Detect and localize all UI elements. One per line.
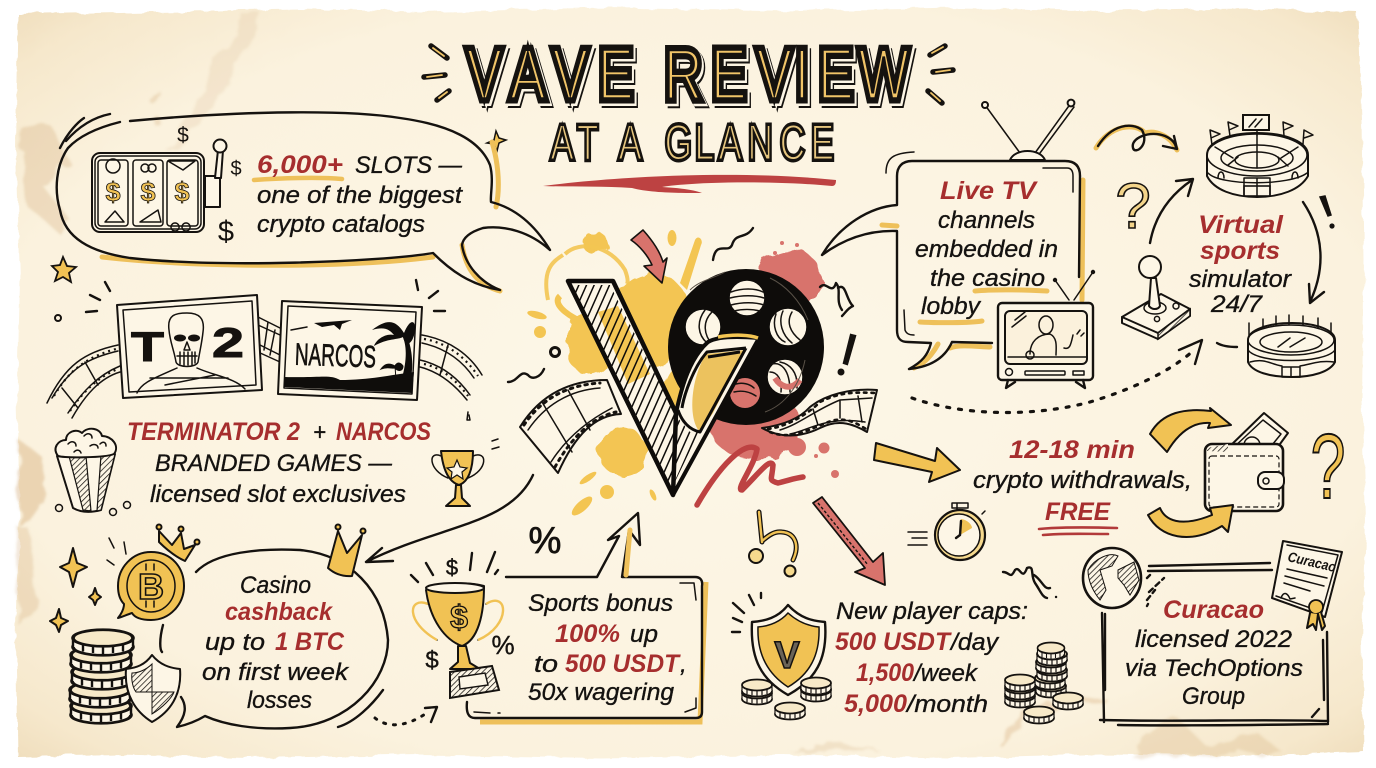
poster: Narcos xyxy=(278,301,422,400)
text: withdrawals: 12-18 min xyxy=(1009,436,1135,464)
icon: joystick xyxy=(1122,256,1190,339)
icons: sparkles xyxy=(50,548,101,632)
text: sports bonus: 50x wagering xyxy=(528,679,674,706)
text: player caps: /month xyxy=(905,691,988,718)
icon: popcorn xyxy=(56,429,130,516)
icon: big trophy: % xyxy=(491,630,515,660)
text: player caps: 1,500 xyxy=(856,659,914,687)
arrows: yellow cycle xyxy=(1148,408,1233,537)
panel: sports bonus xyxy=(411,513,706,722)
icon: globe xyxy=(1083,548,1141,608)
text: curacao: Group xyxy=(1182,683,1245,710)
icon: crown on bubble xyxy=(328,524,366,576)
text: virtual sports: Virtual xyxy=(1198,211,1284,239)
icon: stopwatch xyxy=(908,503,985,560)
text: virtual sports: 24/7 xyxy=(1210,291,1263,318)
icons: coin stacks xyxy=(1005,642,1083,724)
red scribble xyxy=(697,447,803,505)
text: live tv: embedded in xyxy=(915,236,1058,263)
text: live tv: channels xyxy=(938,207,1035,234)
poster: Terminator 2: 2 xyxy=(212,319,244,366)
text: player caps: New player caps: xyxy=(836,598,1028,625)
title: VAVE REVIEW: VAVE REVIEW xyxy=(469,39,912,119)
icon: stadium top xyxy=(1207,115,1313,197)
text: casino cashback: losses xyxy=(247,687,312,714)
panel: slots bubble xyxy=(57,112,550,291)
squiggle xyxy=(1003,567,1056,598)
icons: coins under shield xyxy=(742,678,831,720)
red title underline xyxy=(543,175,836,193)
text: virtual sports: sports xyxy=(1200,237,1280,265)
text: live tv xyxy=(915,177,1058,323)
text: player caps: /week xyxy=(912,660,979,687)
decorative squiggles around logo xyxy=(508,228,855,382)
icon: slot machine: $ xyxy=(177,124,189,147)
bubble outline xyxy=(57,112,550,291)
panel: curacao license xyxy=(1083,541,1342,725)
text: curacao: Curacao xyxy=(1163,596,1264,624)
text: sports bonus: , xyxy=(680,651,687,678)
text: withdrawals: FREE xyxy=(1045,498,1111,526)
bubble outline xyxy=(160,550,388,728)
text: casino cashback xyxy=(202,572,350,714)
icon: V shield xyxy=(732,593,825,695)
icon: slot machine: $ xyxy=(105,177,121,207)
arrow: yellow to withdrawals xyxy=(874,443,960,482)
icon: small circle xyxy=(55,315,61,321)
arrow: red to player caps xyxy=(813,497,885,585)
icon: gold crown xyxy=(156,524,200,561)
text: player caps xyxy=(835,598,1028,718)
icon: coin stack xyxy=(70,630,133,723)
text: 6,000+ slots: one of the biggest xyxy=(257,182,463,209)
icon: big trophy xyxy=(411,552,515,698)
text: Terminator 2 + Narcos: BRANDED GAMES — xyxy=(155,450,392,477)
text: live tv: lobby xyxy=(921,293,982,320)
text: curacao xyxy=(1125,596,1303,710)
icon: slot machine xyxy=(92,124,242,248)
poster: Terminator 2 xyxy=(117,295,262,398)
text: Terminator 2 + Narcos: TERMINATOR 2 xyxy=(127,418,300,446)
curved arrows xyxy=(1150,179,1335,303)
icon: big trophy: $ xyxy=(446,555,458,580)
icon: big trophy: $ xyxy=(450,599,468,635)
icon: wallet with money xyxy=(1205,413,1288,511)
certificate: Curacao xyxy=(1286,548,1338,575)
text: player caps: /day xyxy=(949,629,1000,656)
poster: Terminator 2: T xyxy=(131,323,164,370)
text: curacao: licensed 2022 xyxy=(1135,626,1292,653)
panel: new player caps xyxy=(732,512,1083,724)
speech box xyxy=(822,152,1083,369)
text: player caps: 5,000 xyxy=(844,690,907,718)
poster: Narcos: NARCOS xyxy=(294,337,377,374)
bonus box xyxy=(467,513,706,722)
arrow: dotted to virtual sports xyxy=(912,340,1202,413)
connector lines xyxy=(1148,563,1272,571)
icon: gold trophy small xyxy=(432,412,499,506)
panel: crypto withdrawals xyxy=(908,408,1346,560)
radiating dashes xyxy=(86,280,445,312)
text: curacao: via TechOptions xyxy=(1125,655,1303,682)
text: player caps: 500 USDT xyxy=(835,628,953,656)
dash xyxy=(1217,343,1237,347)
icon: slot machine: $ xyxy=(230,158,242,180)
subtitle: AT A GLANCE: AT A GLANCE xyxy=(550,115,834,171)
text: virtual sports xyxy=(1189,211,1292,318)
central splashes xyxy=(526,230,839,518)
icon: slot machine: $ xyxy=(174,177,190,207)
text: casino cashback: on first week xyxy=(202,659,350,686)
squiggle arrow xyxy=(1096,126,1177,150)
gold star near title xyxy=(487,131,506,151)
dotted arrow xyxy=(375,707,437,725)
text: 6,000+ slots: 6,000+ xyxy=(257,151,343,179)
text: sports bonus: Sports bonus xyxy=(528,590,673,617)
film strips behind posters xyxy=(47,317,482,418)
icon: small tv xyxy=(998,270,1095,388)
text: Terminator 2 + Narcos: + xyxy=(313,419,326,446)
icon: film reel xyxy=(668,269,824,425)
icon: bitcoin bubble: B xyxy=(138,566,164,607)
subtitle: AT A GLANCE: AT A GLANCE xyxy=(550,115,834,171)
film strip left of logo xyxy=(520,380,621,473)
text: sports bonus xyxy=(528,590,687,706)
title: VAVE REVIEW: VAVE REVIEW xyxy=(466,35,909,115)
gold star left xyxy=(52,257,76,282)
icon: yellow question mark: ? xyxy=(1310,416,1346,518)
title: VAVE REVIEW: VAVE REVIEW xyxy=(466,35,909,115)
icon: percent: % xyxy=(529,520,561,561)
icon: slot machine: $ xyxy=(140,177,156,207)
text: casino cashback: 1 BTC xyxy=(275,628,345,656)
license frame xyxy=(1100,613,1328,725)
text: Terminator 2 + Narcos xyxy=(127,418,431,508)
logo letter V xyxy=(568,281,759,495)
text: casino cashback: Casino xyxy=(240,572,311,599)
text: 6,000+ slots: SLOTS — xyxy=(355,152,462,179)
title: VAVE REVIEW: VAVE REVIEW xyxy=(468,38,911,117)
text: Terminator 2 + Narcos: NARCOS xyxy=(336,418,431,446)
red splatter xyxy=(701,241,839,478)
icon: V shield: V xyxy=(774,635,800,677)
panel: virtual sports xyxy=(912,115,1335,413)
text: live tv: the casino xyxy=(930,265,1045,292)
icon: shield xyxy=(126,655,180,722)
red arrow into logo xyxy=(631,230,667,283)
text: 6,000+ slots: crypto catalogs xyxy=(257,211,425,238)
certificate xyxy=(1272,541,1342,630)
text: sports bonus: 100% xyxy=(555,620,620,648)
panel: casino cashback xyxy=(50,524,388,728)
film strip right of logo xyxy=(762,390,877,436)
icon: question mark: ? xyxy=(1115,170,1151,242)
text: virtual sports: simulator xyxy=(1189,266,1292,293)
icon: bitcoin bubble xyxy=(107,538,184,620)
text: withdrawals xyxy=(973,436,1192,535)
marks: exclamation and question xyxy=(749,512,796,576)
text: sports bonus: 500 USDT xyxy=(565,650,682,678)
text: casino cashback: cashback xyxy=(225,598,333,626)
panel: live tv xyxy=(822,100,1095,388)
arrow: curved to cashback xyxy=(366,475,533,562)
text: Terminator 2 + Narcos: licensed slot exclusives xyxy=(150,481,406,508)
text: sports bonus: to xyxy=(534,651,558,678)
text: 6,000+ slots xyxy=(254,151,463,238)
text: casino cashback: up to xyxy=(205,629,265,656)
icon: stadium bottom xyxy=(1248,315,1335,377)
text: withdrawals: crypto withdrawals, xyxy=(973,467,1192,494)
icon: tv antenna xyxy=(982,100,1074,160)
panel: branded games xyxy=(47,280,499,516)
icon: big trophy: $ xyxy=(425,647,439,674)
text: live tv: Live TV xyxy=(940,177,1039,205)
yellow splatter xyxy=(526,230,735,518)
text: sports bonus: up xyxy=(630,621,658,648)
icon: slot machine: $ xyxy=(218,216,234,248)
